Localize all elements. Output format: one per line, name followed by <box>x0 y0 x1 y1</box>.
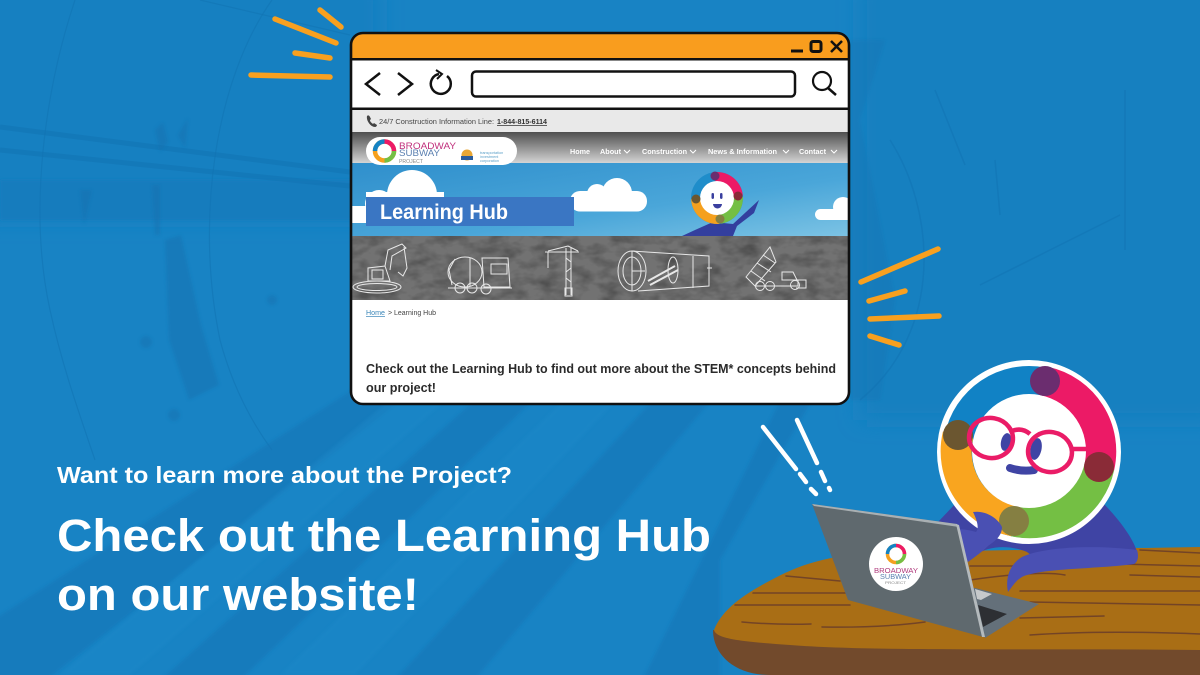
mini mascot <box>682 172 759 236</box>
main heading: Check out the Learning Hub <box>57 510 711 561</box>
browser title bar <box>351 33 849 60</box>
laptop sticker logo: PROJECT <box>885 580 907 585</box>
website navigation bar: About <box>600 149 622 156</box>
ring segment: green <box>1014 467 1099 523</box>
icon: tower crane <box>545 246 579 296</box>
small heading: Want to learn more about the Project? <box>57 462 512 488</box>
construction line art strip <box>351 236 849 300</box>
breadcrumb: Home <box>366 310 385 317</box>
laptop <box>812 504 1039 638</box>
website navigation bar: Home <box>570 149 590 156</box>
mascot arm on table <box>1007 547 1138 592</box>
cloud: centre <box>570 178 647 212</box>
cloud: left <box>351 170 444 223</box>
glasses <box>966 414 1086 476</box>
breadcrumb: > Learning Hub <box>388 310 436 317</box>
website navigation bar: Construction <box>642 149 687 156</box>
website navigation bar: investment <box>480 155 499 159</box>
orange accent rays: top left <box>251 10 341 77</box>
mascot body <box>938 502 1138 564</box>
laptop lid <box>812 504 983 637</box>
cloud: right <box>815 197 848 220</box>
icon: tunnel boring machine <box>618 251 712 291</box>
icon: cement mixer <box>448 257 512 294</box>
face <box>999 432 1044 471</box>
mascot head <box>937 360 1121 544</box>
website navigation bar: News & Information <box>708 149 777 156</box>
icon: dump truck <box>746 247 806 290</box>
website navigation bar: Contact <box>799 149 827 156</box>
table <box>713 547 1200 675</box>
white signal lines from laptop <box>763 420 830 494</box>
Learning Hub page title: Learning Hub <box>380 201 508 224</box>
ring segment: pink <box>1045 382 1101 467</box>
website navigation bar: transportation <box>480 151 503 155</box>
orange accent rays: right <box>861 249 939 345</box>
laptop sticker logo: BROADWAY <box>874 568 918 575</box>
icon: excavator <box>353 244 407 293</box>
breadcrumb <box>366 310 436 317</box>
main heading: on our website! <box>57 569 419 620</box>
Learning Hub page title <box>366 197 574 226</box>
website body text: our project! <box>366 381 436 395</box>
browser window <box>351 33 855 404</box>
website body text: Check out the Learning Hub to find out more about the STEM* concepts behind <box>366 362 836 376</box>
website info strip: 24/7 Construction Information Line: <box>379 117 494 126</box>
browser toolbar <box>352 69 848 110</box>
ring joints <box>943 366 1114 536</box>
website info strip <box>351 110 849 132</box>
website info strip: 1-844-815-6114 <box>497 117 548 126</box>
website navigation bar: BROADWAY <box>399 141 456 151</box>
website navigation bar: corporation <box>480 159 499 163</box>
website navigation bar <box>351 132 849 165</box>
ring segment: orange <box>956 435 1014 521</box>
laptop sticker logo <box>869 537 923 591</box>
laptop sticker logo: SUBWAY <box>880 574 911 581</box>
website banner sky <box>351 163 855 236</box>
mascot hand <box>950 512 1002 562</box>
main heading <box>57 510 711 620</box>
website navigation bar: PROJECT <box>399 159 424 165</box>
website body text <box>366 362 836 395</box>
laptop base <box>960 588 1039 638</box>
website navigation bar: SUBWAY <box>399 148 440 158</box>
